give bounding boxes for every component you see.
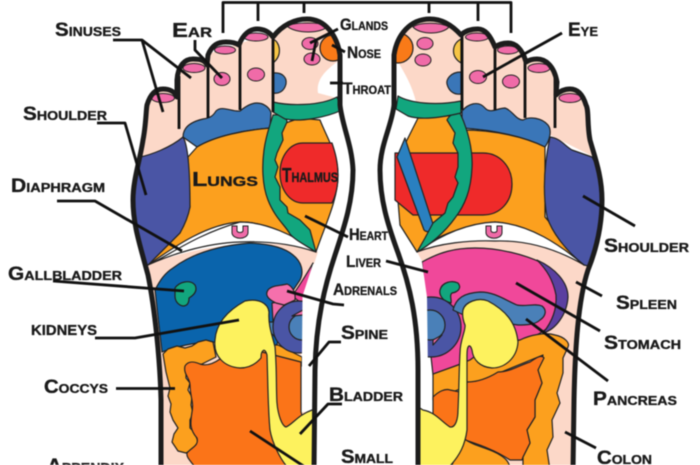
right ring <box>401 297 461 357</box>
left toe tips <box>152 23 328 102</box>
label: eye: Eye <box>568 20 598 41</box>
left adrenal <box>267 284 295 305</box>
left foot outline <box>133 19 353 465</box>
right blue diagonal <box>397 138 433 232</box>
right pancreas <box>453 292 545 325</box>
left heart icon <box>232 226 248 238</box>
left blue throat spot <box>273 73 286 93</box>
label: spine: Spine <box>341 323 388 344</box>
left spots <box>214 38 320 86</box>
right lower orange <box>450 438 510 465</box>
right liver <box>422 248 558 375</box>
right toe tips <box>413 23 581 102</box>
right blue throat spot <box>447 72 461 94</box>
right thalmus <box>395 153 512 215</box>
left thalmus <box>280 143 338 203</box>
label: nose: Nose <box>347 43 381 62</box>
bracket over toes <box>223 2 511 33</box>
right lungs <box>396 116 571 254</box>
right nose orange <box>383 33 413 63</box>
right heart band <box>417 113 472 252</box>
label: ear: Ear <box>172 20 212 42</box>
label: spleen: Spleen <box>616 293 677 314</box>
label: diaphragm: Diaphragm <box>11 176 105 197</box>
label: adrenals: Adrenals <box>333 280 397 299</box>
right yellow kidney and ureter <box>415 300 518 465</box>
right green gallbladder <box>440 282 460 303</box>
left yellow toe spot <box>273 39 279 63</box>
label: gallbladder: Gallbladder <box>8 264 123 285</box>
label: thalmus: Thalmus <box>282 165 338 187</box>
right yellow toe spot <box>453 39 461 63</box>
right foot skin: toes <box>398 21 592 156</box>
right spots <box>415 38 520 88</box>
right foot <box>380 10 610 465</box>
left foot <box>130 10 353 465</box>
label: kidneys: kidneys <box>31 315 97 340</box>
left lower light orange <box>255 345 302 366</box>
left nose orange <box>318 34 338 62</box>
left lungs <box>148 118 338 265</box>
left toe dividers <box>179 35 273 129</box>
right lower colon <box>433 334 568 465</box>
label: glands: Glands <box>340 15 388 34</box>
label: heart: Heart <box>349 225 389 244</box>
label: shoulder right: Shoulder <box>604 236 690 257</box>
right white spine strip <box>410 255 433 412</box>
label: lungs: Lungs <box>192 169 258 191</box>
right crescent <box>537 260 568 333</box>
label: liver: Liver <box>346 252 381 271</box>
left heart band <box>263 115 316 252</box>
right foot skin: sole <box>417 239 590 465</box>
left liver <box>155 243 302 352</box>
left lung bumps <box>183 103 271 147</box>
left yellow kidney and ureter <box>215 300 320 465</box>
leader lines <box>53 29 635 465</box>
right toe dividers <box>462 33 555 128</box>
left ring <box>272 300 304 354</box>
left throat band <box>273 97 342 120</box>
label: pancreas: Pancreas <box>593 389 677 410</box>
left gallbladder <box>175 282 196 306</box>
left foot skin: sole <box>146 243 318 465</box>
right shoulder <box>543 136 600 267</box>
left small intestine <box>185 352 318 465</box>
label: sinuses: Sinuses <box>55 20 121 41</box>
label: throat: Throat <box>343 79 392 98</box>
right heart icon <box>486 226 502 238</box>
label: shoulder left: Shoulder <box>23 104 108 125</box>
left small blue <box>269 320 275 338</box>
right diaphragm white arch <box>417 222 584 265</box>
left foot skin: toes <box>142 21 338 156</box>
left colon <box>163 340 216 453</box>
right foot outline <box>380 19 602 465</box>
label: stomach: Stomach <box>604 333 681 354</box>
right dark small intestine <box>433 356 544 460</box>
right lung bumps <box>462 104 550 147</box>
right throat band <box>396 96 461 118</box>
left diaphragm white arch <box>148 222 316 265</box>
left adrenal triangle <box>292 263 313 305</box>
left white spine strip <box>301 264 320 368</box>
left shoulder <box>130 137 190 265</box>
label: coccys: Coccys <box>44 377 108 398</box>
left ring base pink <box>270 302 284 322</box>
label: bladder: Bladder <box>329 385 404 406</box>
